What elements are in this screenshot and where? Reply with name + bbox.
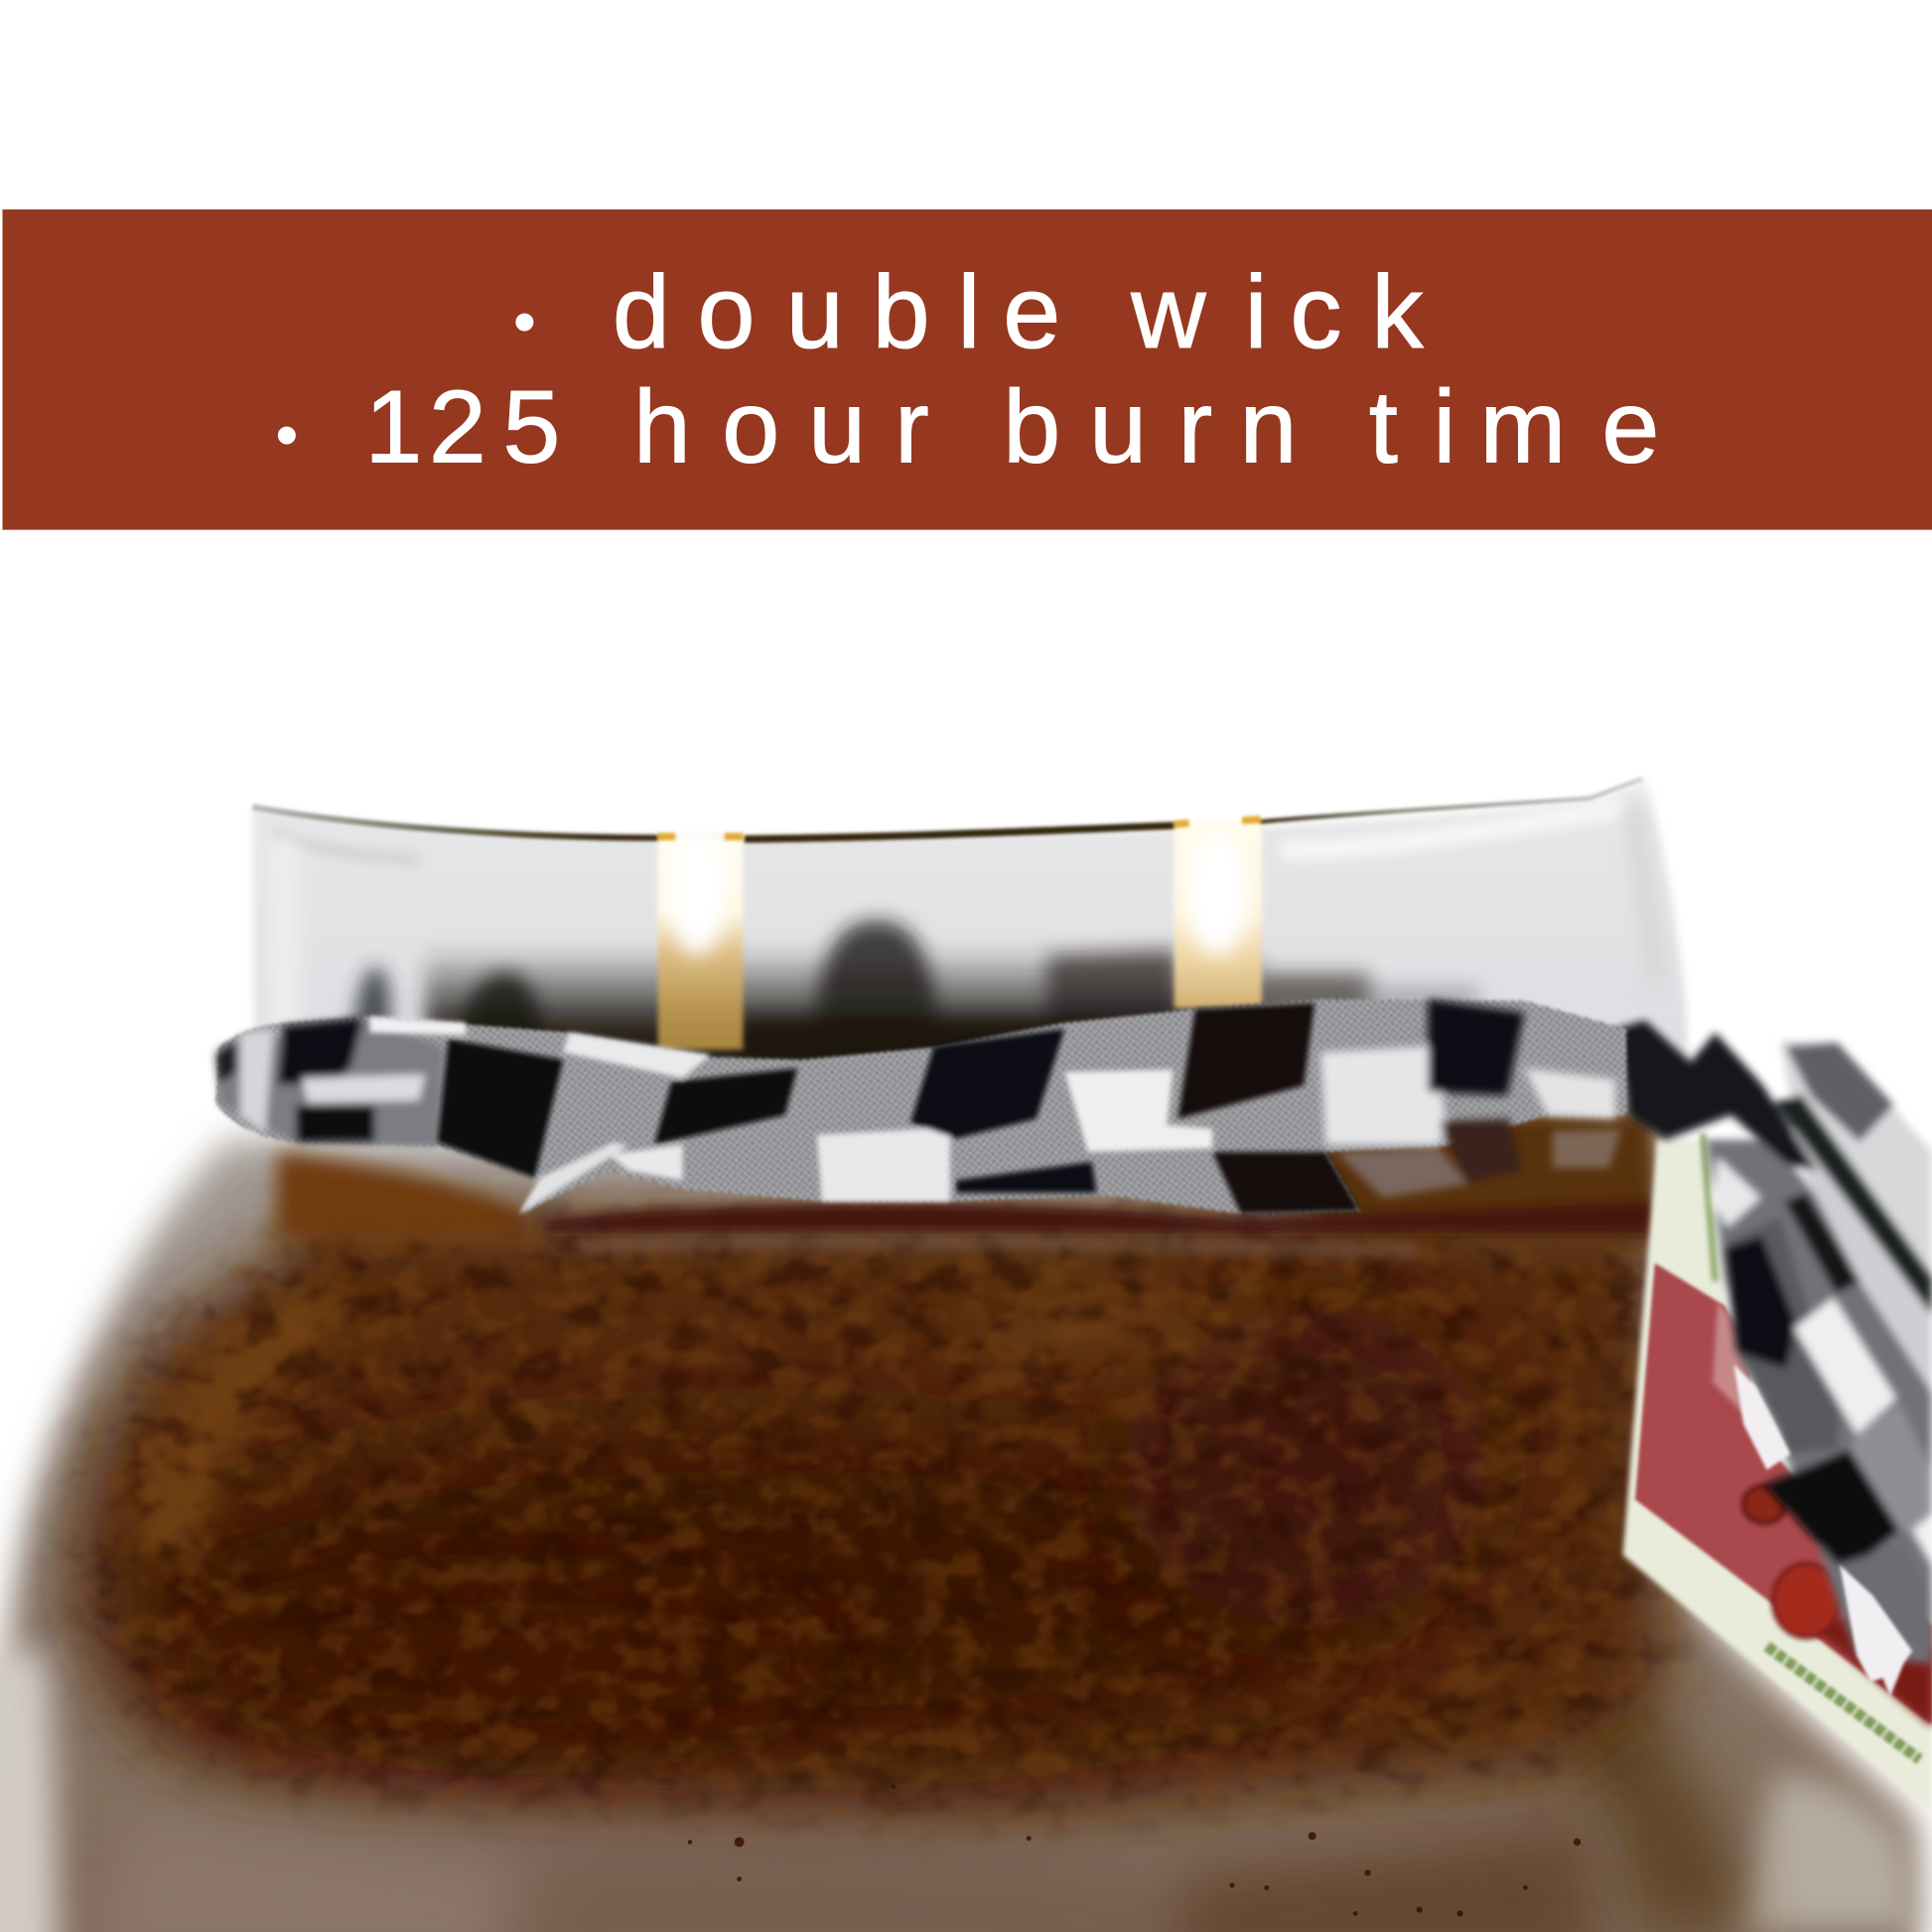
jar body (0, 1140, 1916, 1932)
candle jar photo (0, 778, 1932, 1932)
knot (1616, 1021, 1818, 1171)
tail white stripes (1713, 1157, 1760, 1227)
glass beyond ribbon tail (1780, 1041, 1932, 1307)
ribbon tails and knot (1616, 1021, 1932, 1663)
black checks (438, 1038, 563, 1177)
ribbon fringes (1733, 1364, 1912, 1697)
warm wax highlight (123, 1288, 369, 1589)
bullet two: • (276, 401, 298, 470)
left end of ribbon, soft (215, 1018, 444, 1146)
tag green print (1767, 1646, 1920, 1759)
feature: double wick: double wick (613, 255, 1424, 370)
feature: 125 hour burn time: 125 hour burn time (364, 369, 1659, 484)
buffalo check ribbon (215, 1000, 1626, 1213)
pale left and lower right of jar (0, 1639, 1916, 1932)
ribbon base (215, 1000, 1626, 1213)
banner background (2, 209, 1932, 530)
light outer stripe (1780, 1128, 1932, 1392)
hang tag (1622, 1134, 1932, 1813)
molten wax fill (25, 1098, 1708, 1854)
tail checks (1727, 1217, 1840, 1453)
black outer tail stripe (1774, 1094, 1932, 1315)
wax residue seen through the glass (351, 920, 1478, 1078)
dark wax core (123, 1430, 1405, 1749)
bottom glass haze (73, 1811, 1601, 1932)
glass jar neck (252, 778, 1691, 1109)
pale checks (369, 1017, 466, 1035)
dark band below ribbon (542, 1201, 1651, 1232)
warm band below ribbon right (1318, 1109, 1657, 1244)
bullet one: • (514, 288, 535, 356)
glass rim line (252, 778, 1642, 839)
tail body (1707, 1140, 1932, 1663)
soft right checks (1320, 1046, 1446, 1145)
wax speckles (688, 1784, 1581, 1916)
right flame (1174, 821, 1262, 1008)
banner (2, 209, 1932, 530)
tag red panel (1635, 1263, 1932, 1725)
left flame (658, 832, 743, 1049)
tag cream paper (1622, 1140, 1932, 1813)
